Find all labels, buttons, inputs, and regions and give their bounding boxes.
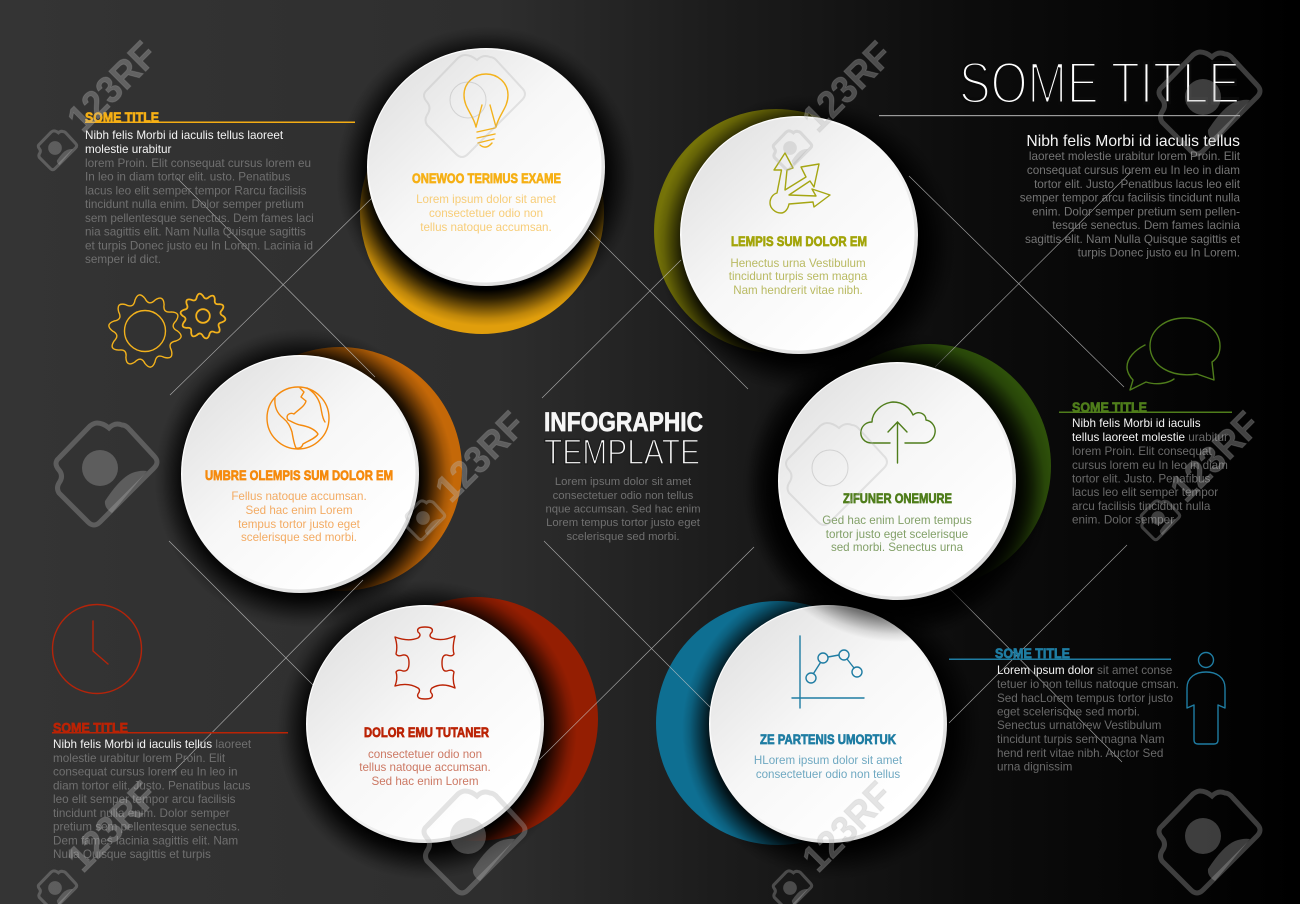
diagonal lines bbox=[169, 172, 1131, 773]
sidebar: amber title rule bbox=[85, 122, 355, 123]
text: green disk: Ged hac enim Lorem tempus bbox=[822, 514, 972, 527]
watermarks: 123RF bbox=[60, 774, 166, 880]
text: red disk: consectetuer odio non bbox=[368, 748, 482, 761]
sidebar: blue title rule bbox=[949, 658, 1171, 660]
watermarks: 123RF bbox=[795, 774, 901, 880]
watermarks: 123RF bbox=[1163, 404, 1269, 510]
sidebar text: red: molestie urabitur lorem Proin. Elit bbox=[53, 752, 226, 765]
heading: green disk: ZIFUNER ONEMURE bbox=[843, 490, 952, 506]
sidebar heading: blue: SOME TITLE bbox=[995, 645, 1070, 661]
heading: orange disk: UMBRE OLEMPIS SUM DOLOR EM bbox=[205, 467, 393, 483]
sidebar text: blue: Sed hacLorem tempus tortor justo bbox=[997, 692, 1174, 705]
icon: clock bbox=[52, 604, 142, 694]
sidebar text: blue: Senectus urnatorew Vestibulum bbox=[997, 719, 1161, 732]
text: blue disk: consectetuer odio non tellus bbox=[756, 768, 900, 781]
watermarks: 123RF bbox=[60, 34, 166, 140]
sidebar heading: red: SOME TITLE bbox=[53, 720, 128, 736]
sidebar text: green: lorem Proin. Elit consequat bbox=[1072, 445, 1212, 458]
watermarks: 123RF bbox=[795, 34, 901, 140]
heading: amber disk: ONEWOO TERIMUS EXAME bbox=[412, 170, 561, 186]
sidebar text: amber: Nibh felis Morbi id iaculis tellus laoreet bbox=[85, 129, 284, 142]
text: orange disk: tempus tortor justo eget bbox=[238, 518, 361, 531]
sidebar text: red: consequat cursus lorem eu In leo in bbox=[53, 766, 238, 778]
text: green disk: tortor justo eget scelerisque bbox=[826, 528, 968, 541]
sidebar text: amber: In leo in diam tortor elit. usto. Penatibus bbox=[85, 170, 290, 184]
sidebar text: blue: hend rerit vitae nibh. Auctor Sed bbox=[997, 747, 1163, 760]
text: amber disk: tellus natoque accumsan. bbox=[420, 221, 552, 234]
sidebar text: green: arcu facilisis tincidunt nulla bbox=[1072, 500, 1211, 513]
panel: blue disk bbox=[709, 605, 947, 843]
sidebar text: blue: eget scelerisque sed morbi. bbox=[997, 706, 1140, 718]
intro text: enim. Dolor semper pretium sem pellen- bbox=[1032, 206, 1240, 218]
center text: Lorem tempus tortor justo eget bbox=[546, 517, 701, 529]
sidebar text: blue: urna dignissim bbox=[997, 760, 1072, 774]
sidebar text: green: urabitur bbox=[1185, 431, 1228, 444]
sidebar: green title rule bbox=[1059, 412, 1232, 413]
center heading bbox=[544, 407, 703, 472]
sidebar text: red: Dem fames lacinia sagittis elit. Nam bbox=[53, 834, 238, 848]
sidebar text: blue: tincidunt turpis sem magna Nam bbox=[997, 733, 1165, 746]
sidebar text: red: diam tortor elit. Justo. Penatibus lacus bbox=[53, 780, 251, 792]
sidebar text: red: Nulla Quisque sagittis et turpis bbox=[53, 848, 211, 861]
sidebar text: amber: et turpis Donec justo eu In Lorem. Lacinia id bbox=[85, 240, 313, 252]
icon: light bulb bbox=[464, 74, 508, 147]
sidebar text: amber: semper id dict. bbox=[85, 253, 161, 266]
text: olive disk: tincidunt turpis sem magna bbox=[729, 270, 868, 283]
sidebar text: green: tortor elit. Justo. Penatibus bbox=[1072, 472, 1211, 486]
sidebar text: amber: molestie urabitur bbox=[85, 143, 172, 156]
center text: consectetuer odio non tellus bbox=[553, 490, 694, 502]
sidebar text: red: laoreet bbox=[212, 738, 252, 751]
watermarks: 123RF bbox=[428, 404, 534, 510]
text: orange disk: Sed hac enim Lorem bbox=[246, 504, 352, 517]
text: amber disk: Lorem ipsum dolor sit amet bbox=[416, 193, 557, 206]
sidebar text: green: tellus laoreet molestie bbox=[1072, 431, 1185, 444]
text: blue disk: HLorem ipsum dolor sit amet bbox=[754, 754, 903, 767]
sidebar text: green: lacus leo elit semper tempor bbox=[1072, 486, 1218, 499]
shadow cast by green disk on blue disk bbox=[741, 330, 1053, 642]
heading: olive disk: LEMPIS SUM DOLOR EM bbox=[731, 233, 867, 249]
icon: cloud upload bbox=[861, 402, 935, 463]
center text: scelerisque sed morbi. bbox=[566, 531, 680, 543]
panel: red disk bbox=[306, 605, 544, 843]
icon: gears bbox=[109, 294, 225, 367]
sidebar text: red: pretium sem pellentesque senectus. bbox=[53, 820, 240, 834]
panel: orange disk bbox=[181, 355, 419, 593]
icon: chat bubbles bbox=[1127, 318, 1220, 390]
sidebar text: amber: lacus leo elit semper tempor Rarcu facilisis bbox=[85, 184, 307, 198]
sidebar text: green: cursus lorem eu In leo in diam bbox=[1072, 459, 1228, 472]
text: olive disk: Nam hendrerit vitae nibh. bbox=[733, 284, 863, 297]
intro text: tortor elit. Justo. Penatibus lacus leo elit bbox=[1034, 178, 1241, 191]
sidebar text: green: Nibh felis Morbi id iaculis bbox=[1072, 417, 1201, 430]
center text: Lorem ipsum dolor sit amet bbox=[555, 476, 692, 488]
sidebar text: amber: sem pellentesque senectus. Dem fames laci bbox=[85, 212, 314, 225]
heading: red disk: DOLOR EMU TUTANER bbox=[364, 724, 489, 740]
sidebar text: amber: nia sagittis elit. Nam Nulla Quisque sagittis bbox=[85, 226, 306, 238]
center heading: INFOGRAPHIC bbox=[544, 407, 703, 437]
sidebar heading: amber: SOME TITLE bbox=[85, 109, 159, 125]
text: amber disk: consectetuer odio non bbox=[429, 207, 543, 220]
text: orange disk: Fellus natoque accumsan. bbox=[231, 490, 367, 503]
text: green disk: sed morbi. Senectus urna bbox=[831, 541, 964, 554]
text: red disk: tellus natoque accumsan. bbox=[359, 761, 491, 774]
sidebar text: amber: tincidunt nulla enim. Dolor semper pretium bbox=[85, 198, 304, 211]
backing disk: green bbox=[807, 344, 1051, 588]
icon: arrows bbox=[770, 153, 830, 213]
main title: SOME TITLE bbox=[959, 51, 1240, 116]
sidebar text: red: leo elit semper tempor arcu facilisis bbox=[53, 793, 236, 806]
sidebar: red title rule bbox=[52, 732, 288, 734]
intro lead: Nibh felis Morbi id iaculis tellus bbox=[1026, 133, 1240, 150]
icon: person bbox=[1187, 652, 1225, 744]
icon: puzzle piece bbox=[395, 627, 455, 699]
shadows bbox=[154, 26, 1045, 880]
center heading: TEMPLATE bbox=[544, 433, 700, 472]
icon: line chart bbox=[792, 636, 864, 708]
main title rule bbox=[879, 115, 1240, 116]
text: olive disk: Henectus urna Vestibulum bbox=[730, 257, 866, 270]
intro text: semper tempor arcu facilisis tincidunt nulla bbox=[1020, 192, 1240, 204]
heading: blue disk: ZE PARTENIS UMORTUK bbox=[760, 731, 896, 747]
panel: green disk bbox=[778, 362, 1016, 600]
sidebar text: green: enim. Dolor semper bbox=[1072, 514, 1174, 526]
intro text: sagittis elit. Nam Nulla Quisque sagittis et bbox=[1025, 233, 1241, 246]
backing disk: olive bbox=[654, 109, 898, 353]
sidebar text: blue: Lorem ipsum dolor bbox=[997, 664, 1094, 677]
intro text: laoreet molestie urabitur lorem Proin. Elit bbox=[1029, 150, 1241, 163]
backing disk: red bbox=[354, 597, 598, 841]
backing disk: blue bbox=[656, 601, 900, 845]
text: orange disk: scelerisque sed morbi. bbox=[241, 531, 357, 544]
sidebar text: blue: tetuer io non tellus natoque cmsan. bbox=[997, 678, 1179, 691]
sidebar text: amber: lorem Proin. Elit consequat cursus lorem eu bbox=[85, 157, 311, 170]
panel: olive disk bbox=[680, 116, 918, 354]
intro text: tesque senectus. Dem fames lacinia bbox=[1052, 219, 1240, 232]
sidebar heading: green: SOME TITLE bbox=[1072, 399, 1147, 415]
text: red disk: Sed hac enim Lorem bbox=[372, 775, 478, 788]
intro text: turpis Donec justo eu In Lorem. bbox=[1078, 246, 1240, 260]
sidebar text: red: tincidunt nulla enim. Dolor semper bbox=[53, 807, 230, 820]
backing disk: orange bbox=[218, 347, 462, 591]
backing disk: amber bbox=[360, 90, 604, 334]
panel: amber disk bbox=[367, 48, 605, 286]
sidebar text: red: Nibh felis Morbi id iaculis tellus bbox=[53, 738, 212, 751]
center text: nque accumsan. Sed hac enim bbox=[545, 504, 701, 516]
sidebar text: blue: sit amet conse bbox=[1094, 664, 1172, 677]
icon: globe bbox=[267, 387, 329, 449]
intro text: consequat cursus lorem eu In leo in diam bbox=[1027, 164, 1240, 177]
